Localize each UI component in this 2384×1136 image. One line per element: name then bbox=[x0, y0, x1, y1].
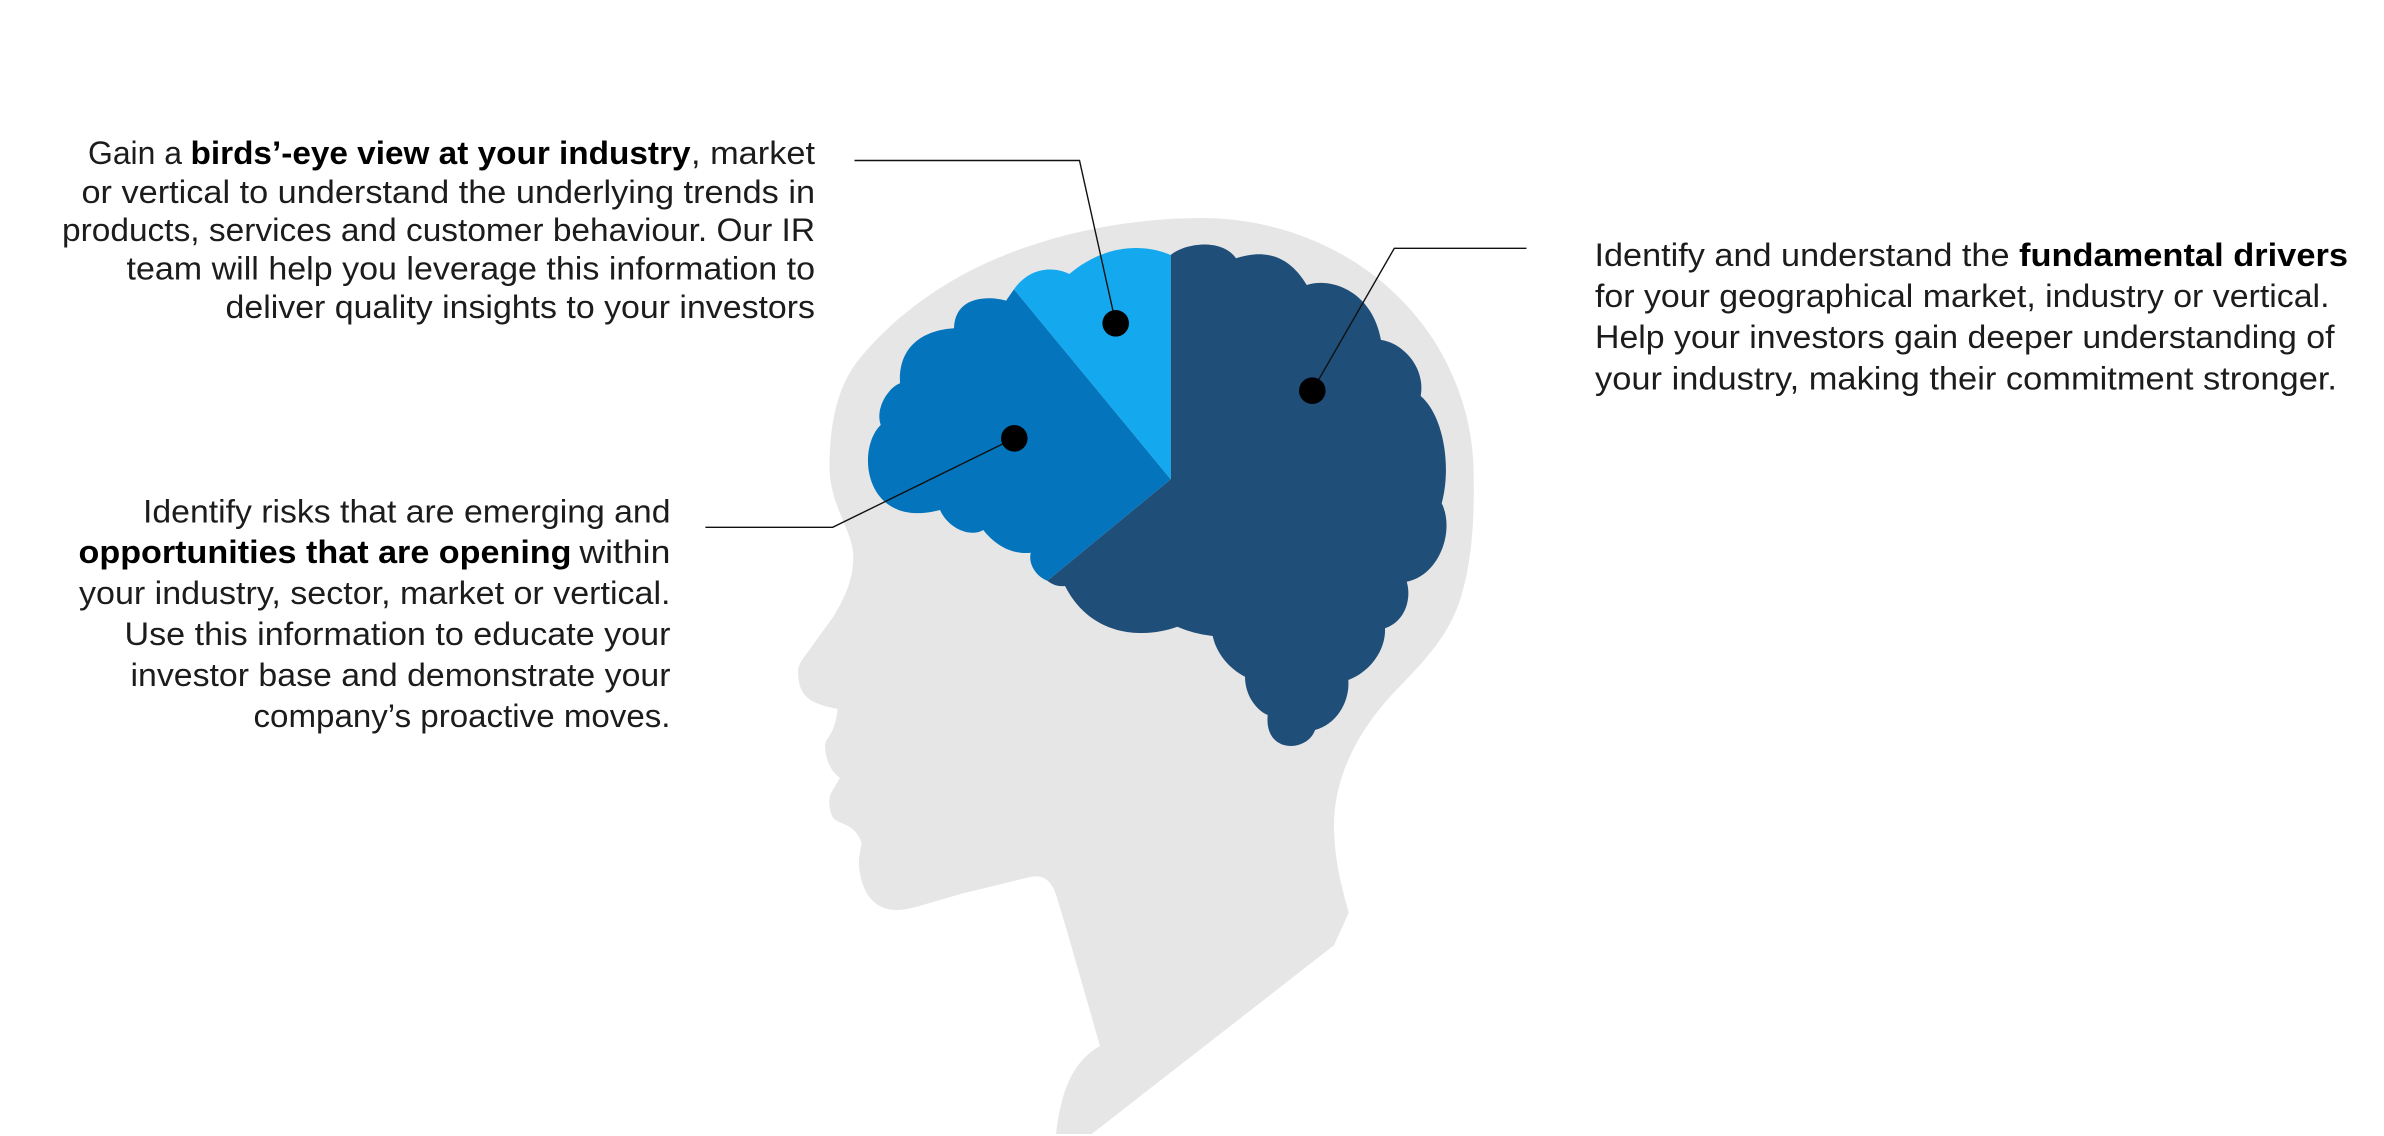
text block: risks and opportunities: your industry, sector, market or vertical. bbox=[79, 575, 670, 611]
text block: fundamental drivers bbox=[1594, 237, 2348, 396]
brain segment: birds-eye view bbox=[1014, 248, 1171, 479]
text block: fundamental drivers: your industry, making their commitment stronger. bbox=[1595, 360, 2337, 396]
text block: risks and opportunities: Identify risks that are emerging and bbox=[143, 494, 670, 530]
text block: birds-eye view: deliver quality insights to your investors bbox=[226, 289, 815, 325]
text block: birds-eye view: or vertical to understand the underlying trends in bbox=[82, 174, 815, 210]
brain segment: fundamental drivers bbox=[1047, 245, 1447, 746]
text block: risks and opportunities: company’s proactive moves. bbox=[254, 698, 670, 734]
marker dot: birds-eye view bbox=[1102, 310, 1129, 337]
head silhouette bbox=[798, 218, 1474, 1134]
leader line: risks and opportunities bbox=[705, 438, 1014, 527]
text block: birds-eye view: products, services and customer behaviour. Our IR bbox=[62, 212, 815, 248]
text block: fundamental drivers: Help your investors gain deeper understanding of bbox=[1595, 319, 2335, 355]
marker dot: risks and opportunities bbox=[1001, 425, 1028, 452]
leader line: birds-eye view bbox=[854, 160, 1116, 323]
text block: fundamental drivers: fundamental drivers bbox=[2019, 237, 2348, 273]
leader line: fundamental drivers bbox=[1312, 248, 1526, 391]
text block: birds-eye view: Gain a bbox=[88, 135, 182, 171]
text block: fundamental drivers: Identify and understand the bbox=[1594, 237, 2010, 273]
text block: risks and opportunities: Use this information to educate your bbox=[124, 616, 671, 652]
text block: risks and opportunities: investor base and demonstrate your bbox=[130, 657, 671, 693]
text block: fundamental drivers: for your geographical market, industry or vertical. bbox=[1595, 278, 2330, 314]
marker dot: fundamental drivers bbox=[1299, 377, 1326, 404]
text block: risks and opportunities: within bbox=[578, 534, 670, 570]
brain bbox=[868, 245, 1447, 746]
text block: risks and opportunities: opportunities that are opening bbox=[78, 534, 572, 570]
text block: birds-eye view: team will help you leverage this information to bbox=[126, 250, 815, 286]
text block: birds-eye view: birds’-eye view at your industry bbox=[190, 135, 691, 171]
text block: birds-eye view: , market bbox=[691, 135, 815, 171]
text block: risks and opportunities bbox=[78, 494, 671, 734]
text block: birds-eye view bbox=[62, 135, 815, 325]
brain segment: risks and opportunities bbox=[868, 289, 1171, 581]
